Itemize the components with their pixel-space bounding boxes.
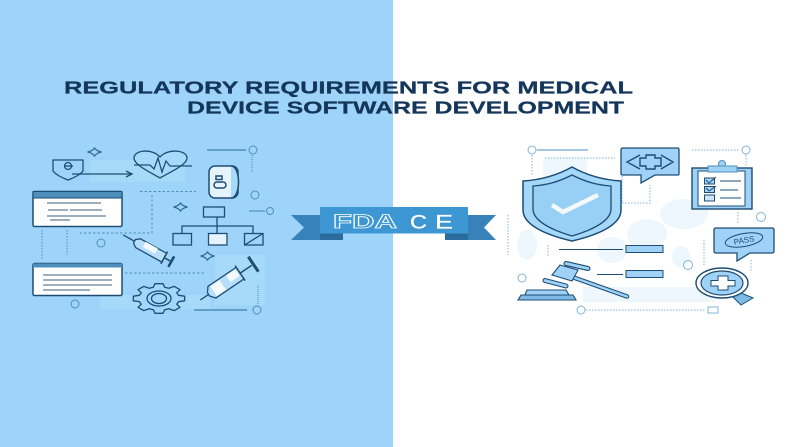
right soft background shapes [517,158,713,302]
icon: heart with pulse [134,151,192,178]
right connector lines and nodes [508,146,766,314]
icon: clipboard checklist [692,160,752,209]
icon: code window bottom [33,264,122,296]
ribbon banner [291,207,496,240]
icon: small shield with arrow [53,160,132,180]
left blue panel [0,0,393,447]
icon: wearable band [209,166,238,198]
title [64,78,633,118]
title: DEVICE SOFTWARE DEVELOPMENT [187,98,624,118]
title: REGULATORY REQUIREMENTS FOR MEDICAL [64,78,633,98]
icon: medical badge [696,268,753,305]
icon: PASS speech bubble: PASS [733,234,755,247]
icon: org chart [173,207,263,245]
CE mark text [410,212,453,234]
left sparkle shapes [88,148,214,260]
icon: large syringe [195,257,258,307]
CE mark text: C [410,212,427,234]
icon: large shield with check [523,167,621,241]
left soft background shapes [90,160,265,309]
icon: gear [133,284,185,313]
icon: small syringe [120,229,175,268]
right white panel [393,0,800,447]
icon: code window top [33,192,122,226]
icon: PASS speech bubble [714,228,774,261]
bars with leader lines [559,246,663,278]
CE mark text: E [435,212,453,234]
left connector lines and nodes [42,146,274,314]
icon: speech bubble with medical cross and arrows [621,148,679,183]
FDA logo text: FDA [333,212,397,233]
icon: gavel [518,264,627,300]
